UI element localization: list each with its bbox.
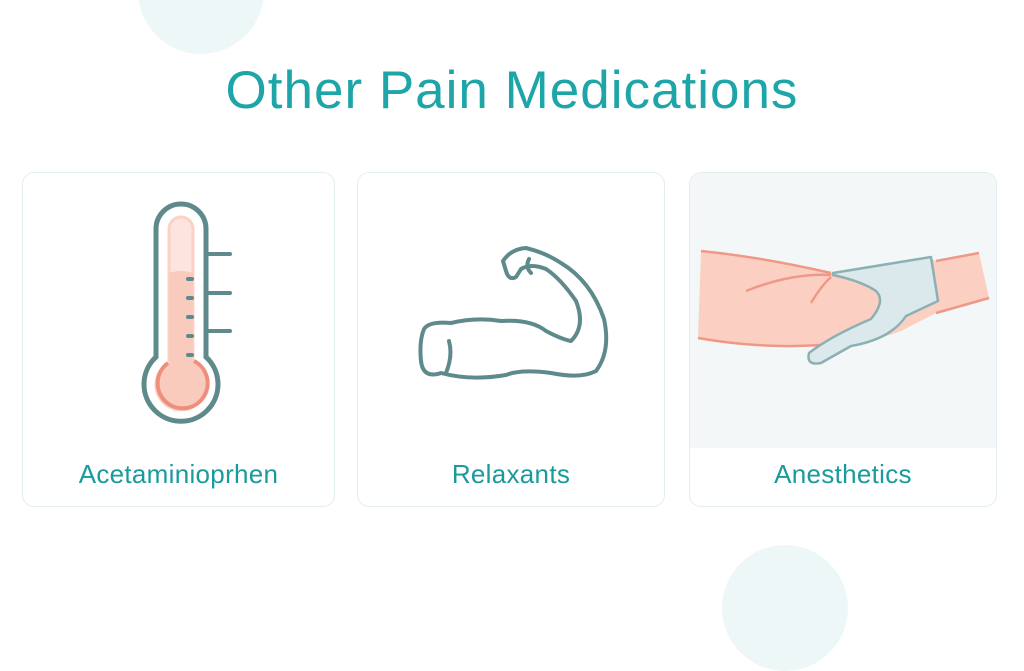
panel: acetaminophen	[22, 172, 335, 507]
panel: relaxants	[357, 172, 665, 507]
label: Acetaminioprhen	[79, 459, 278, 489]
panel: anesthetics	[689, 172, 997, 507]
icon: flexed arm	[418, 246, 608, 380]
icon: thermometer	[142, 202, 232, 424]
icon: hand on arm	[698, 250, 990, 365]
label: Relaxants	[452, 459, 570, 489]
title: Other Pain Medications	[226, 61, 798, 120]
label: Anesthetics	[774, 459, 912, 489]
